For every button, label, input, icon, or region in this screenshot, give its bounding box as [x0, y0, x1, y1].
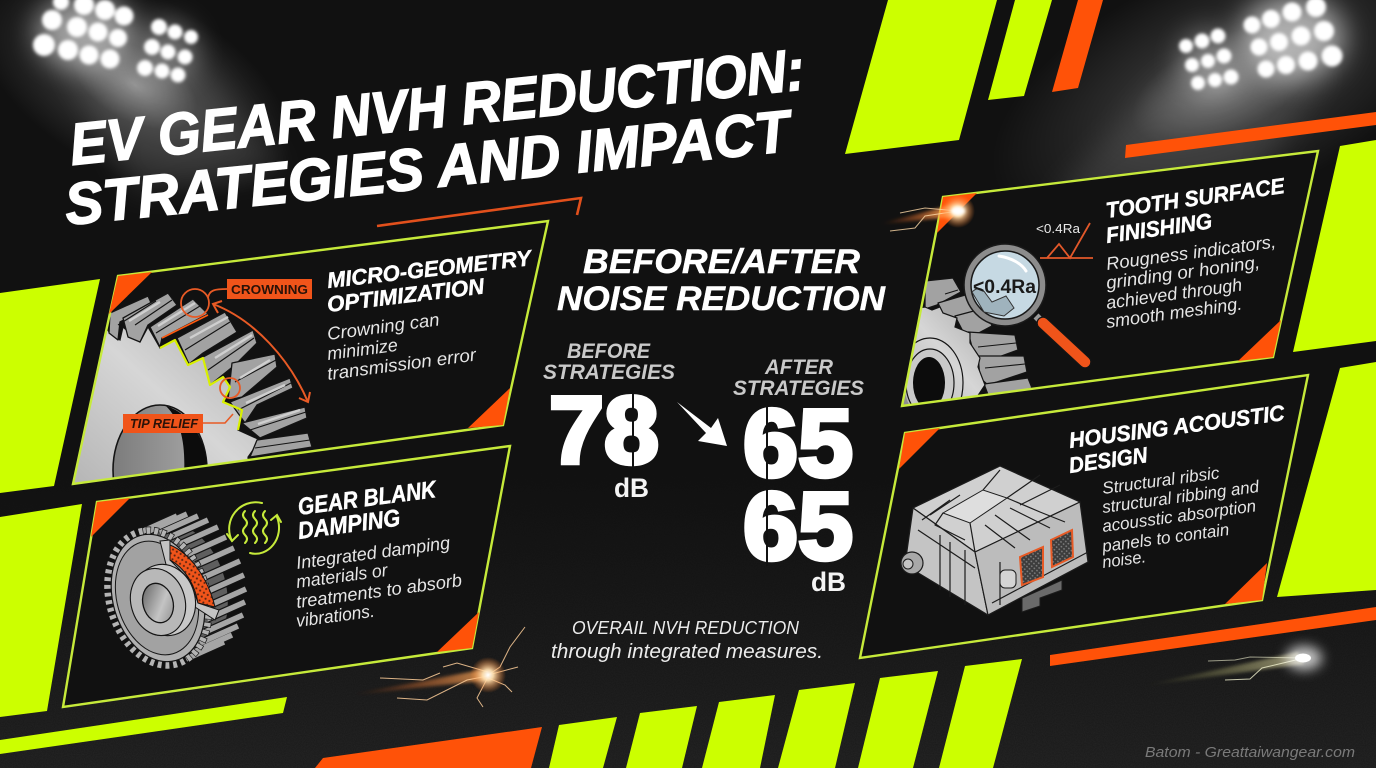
- body text: panels to contain: [1100, 520, 1230, 556]
- panel frame: [902, 151, 1318, 406]
- panel corners: [109, 272, 510, 428]
- crowning callout: [181, 279, 312, 317]
- spark: top right of centre: [880, 194, 975, 231]
- roughness symbol: [1036, 222, 1093, 258]
- right accent blocks: [1050, 140, 1376, 666]
- panel corners: [91, 498, 479, 652]
- gear with damping insert: [93, 511, 246, 677]
- body text: [326, 309, 478, 384]
- heading: [1067, 400, 1287, 478]
- centre heading: BEFORE/AFTER: [583, 243, 860, 281]
- stadium lights left: [0, 0, 327, 244]
- bottom accent stripes: [315, 659, 1022, 768]
- top accent slashes: [845, 0, 1376, 158]
- crowning callout: CROWNING: [231, 283, 308, 297]
- after value: 65: [743, 473, 853, 580]
- heading: TOOTH SURFACE: [1104, 173, 1287, 223]
- icon: magnifier showing <0.4Ra: [964, 244, 1085, 362]
- illustration: gearbox housing: [901, 466, 1088, 615]
- body text: noise.: [1101, 547, 1147, 572]
- heading: [1104, 173, 1287, 248]
- before value: BEFORE: [567, 340, 651, 363]
- body text: Crowning can: [326, 309, 441, 344]
- body text: Rougness indicators,: [1105, 232, 1277, 274]
- body text: grinding or honing,: [1105, 252, 1261, 293]
- after value: STRATEGIES: [733, 377, 864, 400]
- icon: magnifier showing <0.4Ra: <0.4Ra: [973, 277, 1036, 298]
- body text: Structural ribsic: [1101, 463, 1221, 498]
- heading: OPTIMIZATION: [326, 273, 487, 317]
- roughness symbol: <0.4Ra: [1036, 222, 1080, 236]
- body text: smooth meshing.: [1105, 294, 1243, 332]
- title underline bracket: [377, 198, 581, 226]
- tip relief callout: [123, 378, 240, 433]
- body text: treatments to absorb: [295, 570, 463, 612]
- summary note: OVERAIL NVH REDUCTION: [572, 618, 800, 638]
- panel: gear blank damping: [63, 446, 510, 707]
- heading: [296, 476, 439, 545]
- stadium lights right: [948, 0, 1376, 296]
- summary note: through integrated measures.: [551, 641, 823, 663]
- gear illustration with crowning and tip relief: [74, 294, 312, 482]
- centre heading: [557, 243, 886, 318]
- panel frame: [73, 221, 548, 484]
- before value: dB: [614, 473, 649, 503]
- after value: AFTER: [764, 356, 834, 379]
- after value: dB: [811, 567, 846, 597]
- tip relief callout: TIP RELIEF: [130, 417, 198, 431]
- double-headed arc arrow: [213, 301, 310, 402]
- spark: lower right: [1142, 646, 1322, 686]
- title: STRATEGIES AND IMPACT: [62, 98, 797, 238]
- panel: tooth surface finishing: [895, 151, 1318, 428]
- heading: DESIGN: [1067, 442, 1150, 478]
- panel corners: [937, 193, 1281, 361]
- heading: FINISHING: [1104, 208, 1214, 248]
- summary note: [551, 618, 823, 663]
- spark: lightning lower left of centre: [350, 627, 525, 707]
- panel corners: [899, 428, 1267, 604]
- body text: Integrated damping: [295, 533, 451, 573]
- heading: HOUSING ACOUSTIC: [1067, 400, 1287, 453]
- title: EV GEAR NVH REDUCTION:: [67, 36, 807, 178]
- heading: DAMPING: [296, 505, 402, 545]
- heading: MICRO-GEOMETRY: [326, 245, 535, 293]
- body text: [1105, 232, 1277, 332]
- body text: minimize: [326, 335, 399, 364]
- watermark: Batom - Greattaiwangear.com: [1145, 744, 1355, 761]
- panel: housing acoustic design: [860, 375, 1308, 658]
- body text: [1100, 463, 1261, 572]
- before value: STRATEGIES: [543, 361, 675, 384]
- body text: transmission error: [326, 344, 478, 384]
- centre heading: NOISE REDUCTION: [557, 280, 886, 318]
- after value: [733, 356, 864, 597]
- body text: acousstic absorption: [1101, 496, 1257, 536]
- body text: materials or: [295, 560, 390, 592]
- after value: 65: [743, 390, 853, 497]
- body text: vibrations.: [295, 601, 376, 631]
- body text: structural ribbing and: [1101, 477, 1261, 517]
- left accent blocks: [0, 279, 287, 754]
- before value: [543, 340, 675, 503]
- gear illustration: [904, 278, 1031, 404]
- heading: GEAR BLANK: [296, 476, 439, 521]
- body text: achieved through: [1105, 275, 1243, 313]
- panel: micro-geometry optimization: [72, 220, 550, 486]
- body text: [295, 533, 463, 631]
- arrow: [677, 402, 727, 446]
- icon: vibration damping: [227, 502, 281, 554]
- before value: 78: [549, 377, 659, 484]
- heading: [326, 245, 535, 317]
